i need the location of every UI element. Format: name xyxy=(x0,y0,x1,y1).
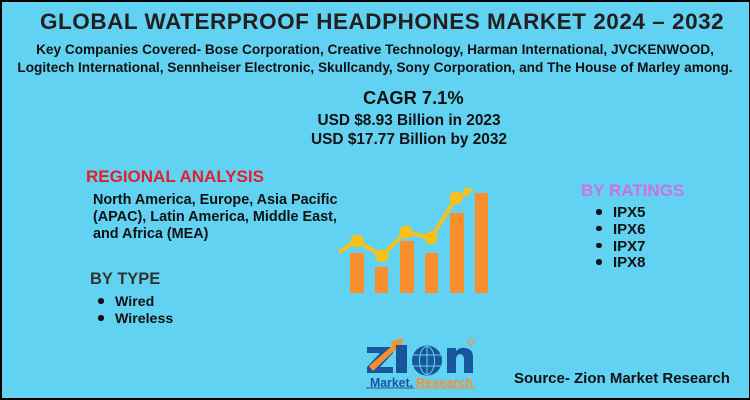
logo: Zion Market Research: Research xyxy=(416,375,473,390)
key companies text: Logitech International, Sennheiser Electronic, Skullcandy, Sony Corporation, and The House of Marley among. xyxy=(17,60,733,75)
market size figures xyxy=(311,112,507,148)
by ratings list: IPX5 xyxy=(613,204,646,221)
by ratings list xyxy=(596,204,646,271)
source note: Source- Zion Market Research xyxy=(514,370,730,387)
by type heading: BY TYPE xyxy=(90,270,160,288)
by ratings list: IPX6 xyxy=(613,221,646,238)
by ratings list: IPX8 xyxy=(613,254,646,271)
by type list: Wireless xyxy=(115,311,173,327)
regional analysis text xyxy=(93,192,338,242)
regional analysis text: (APAC), Latin America, Middle East, xyxy=(93,209,337,225)
by ratings list: IPX7 xyxy=(613,238,646,255)
by type list: Wired xyxy=(115,294,154,310)
by type list xyxy=(98,294,173,327)
key companies text xyxy=(17,42,733,75)
logo: Zion Market Research: Market. xyxy=(370,375,413,390)
market size figures: USD $8.93 Billion in 2023 xyxy=(317,112,501,129)
regional analysis text: and Africa (MEA) xyxy=(93,226,208,242)
market size figures: USD $17.77 Billion by 2032 xyxy=(311,130,507,148)
regional analysis text: North America, Europe, Asia Pacific xyxy=(93,192,337,208)
regional analysis heading: REGIONAL ANALYSIS xyxy=(86,167,264,186)
by ratings heading: BY RATINGS xyxy=(581,181,684,200)
key companies text: Key Companies Covered- Bose Corporation, Creative Technology, Harman International, JVCKENWOOD, xyxy=(36,42,714,57)
title: GLOBAL WATERPROOF HEADPHONES MARKET 2024 – 2032 xyxy=(40,9,724,34)
CAGR heading: CAGR 7.1% xyxy=(363,87,464,108)
